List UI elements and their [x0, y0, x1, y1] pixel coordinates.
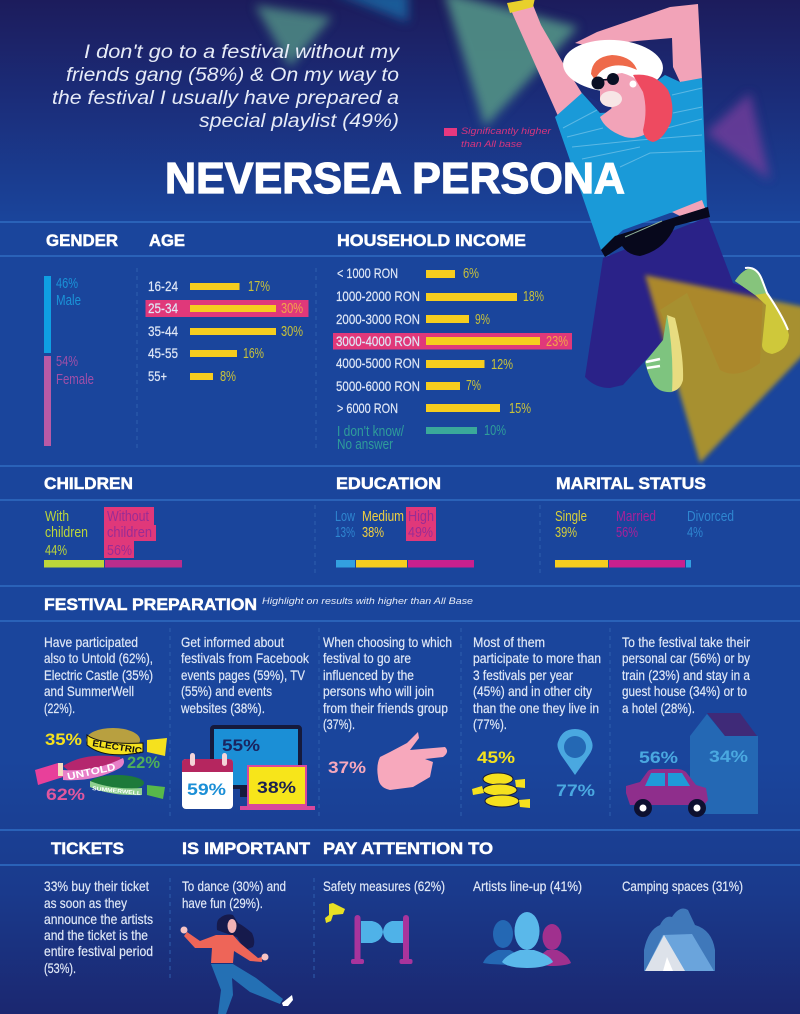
striped shirt [555, 75, 707, 250]
text: travel and stay: train (23%) and stay in a [622, 667, 750, 683]
heading: festival preparation: FESTIVAL PREPARATION [44, 595, 257, 614]
chart: household income: 23% [546, 334, 568, 350]
panel: marital status: Single [555, 509, 587, 525]
icon: location pin: 77% [556, 781, 595, 800]
text: tickets: announce the artists [44, 911, 153, 927]
belt and bum bag [601, 207, 710, 257]
icon: location pin [556, 729, 595, 800]
chart: age [146, 278, 308, 385]
hands [180, 926, 188, 934]
text: festivals attended: Electric Castle (35%) [44, 667, 153, 683]
heading: household income: HOUSEHOLD INCOME [337, 231, 526, 250]
chart: age: 16-24 [148, 278, 178, 294]
panel: gender: 46% [56, 276, 78, 292]
chart: household income [333, 265, 572, 453]
panel: education: Low [335, 509, 355, 525]
text: friends influence: influenced by the [323, 667, 414, 683]
electric label: ELECTRIC [92, 738, 143, 756]
heading: children: CHILDREN [44, 474, 133, 493]
illustration: jumping festival-goer [507, 0, 763, 388]
text: tickets [44, 878, 153, 976]
text: travel and stay: personal car (56%) or by [622, 650, 750, 666]
chart: household income: 3000-4000 RON [336, 333, 420, 349]
panel: education [335, 507, 474, 568]
chart: household income: 10% [484, 423, 506, 439]
icon: safety barrier and camera [325, 903, 412, 964]
panel: education: High [408, 509, 434, 525]
panel: education: 49% [408, 525, 433, 541]
quote: I don't go to a festival without my [84, 41, 400, 63]
panel: gender: Female [56, 372, 94, 388]
text: festival frequency: Most of them [473, 634, 545, 650]
neck gap [587, 96, 618, 113]
chart: age: 30% [281, 324, 303, 340]
beard [600, 91, 622, 107]
text: information sources: websites (38%). [180, 700, 265, 716]
text: is important [182, 878, 286, 911]
icon: stacked wristbands [472, 748, 530, 808]
icon: pointing hand: 37% [328, 758, 366, 777]
untold band back [63, 756, 122, 772]
panel: education: Medium [362, 509, 404, 525]
icon: house: 56% [639, 748, 678, 767]
text: artists: Artists line-up (41%) [473, 878, 582, 894]
panel: marital status: 56% [616, 525, 638, 541]
text: friends influence: (37%). [323, 716, 355, 732]
chart: household income: 15% [509, 401, 531, 417]
laptop [248, 766, 306, 805]
legend: significantly higher: than All base [461, 139, 522, 150]
icon: tv, calendar and laptop: 38% [257, 778, 296, 797]
earring [630, 80, 636, 88]
icon: people [483, 912, 571, 968]
waist skin [672, 200, 705, 216]
hair [217, 914, 254, 950]
jeans [211, 964, 283, 1014]
hair [633, 75, 672, 142]
text: tickets: as soon as they [44, 895, 127, 911]
chart: household income: 2000-3000 RON [336, 311, 420, 327]
panel: gender [44, 276, 94, 446]
untold tab strip [58, 763, 63, 776]
icon: wristbands: 62% [46, 785, 85, 804]
text: tickets: 33% buy their ticket [44, 878, 149, 894]
chart: age: 16% [243, 346, 264, 362]
panel: marital status: 39% [555, 525, 577, 541]
electric tab [147, 738, 167, 756]
hat [562, 37, 664, 95]
panel: children [44, 507, 182, 568]
summerwell tab [147, 785, 165, 799]
chart: household income: 1000-2000 RON [336, 288, 420, 304]
text: information sources: events pages (59%), TV [181, 667, 306, 683]
text: travel and stay: a hotel (28%). [622, 700, 695, 716]
text: camping: Camping spaces (31%) [622, 878, 743, 894]
rope [361, 921, 403, 943]
chart: household income: > 6000 RON [337, 400, 398, 416]
text: information sources: (55%) and events [181, 683, 272, 699]
quote: the festival I usually have prepared a [52, 87, 399, 109]
text: festivals attended: (22%). [44, 700, 75, 716]
icon: wristbands [35, 728, 167, 804]
text: festivals attended: and SummerWell [44, 683, 134, 699]
panel: marital status: Married [616, 509, 656, 525]
text: information sources: Get informed about [181, 634, 284, 650]
right shoe [735, 268, 789, 354]
text: is important: To dance (30%) and [182, 878, 286, 894]
chart: household income: < 1000 RON [337, 265, 398, 281]
text: friends influence [323, 634, 452, 732]
legend: significantly higher: Significantly higher [461, 126, 552, 137]
raised arm [510, 5, 583, 116]
bag zip [625, 221, 662, 237]
posts [354, 915, 360, 963]
face [228, 919, 236, 933]
text: travel and stay: To the festival take their [622, 634, 750, 650]
text: festival frequency: (45%) and in other city [473, 683, 592, 699]
text: festivals attended: also to Untold (62%), [44, 650, 153, 666]
heading: is important: IS IMPORTANT [182, 839, 311, 858]
icon: tv, calendar and laptop: 59% [187, 780, 226, 799]
text: tickets: and the ticket is the [44, 927, 148, 943]
electric band back [86, 728, 140, 752]
text: tickets: (53%). [44, 960, 76, 976]
text: festivals attended: Have participated [44, 634, 138, 650]
icon: tv, calendar and laptop: 55% [222, 736, 260, 755]
chart: age: 30% [281, 301, 303, 317]
text: travel and stay [622, 634, 750, 716]
text: tickets: entire festival period [44, 943, 153, 959]
text: friends influence: persons who will join [323, 683, 434, 699]
panel: education: 13% [335, 525, 355, 541]
sunglasses [592, 73, 619, 90]
text: is important: have fun (29%). [182, 895, 263, 911]
chart: age: 17% [248, 279, 270, 295]
panel: marital status: 4% [687, 525, 703, 541]
hair top [591, 55, 637, 80]
panel: children: 56% [107, 543, 132, 559]
sweater [184, 932, 262, 963]
trousers [585, 217, 763, 388]
chart: household income: 18% [523, 289, 544, 305]
text: festival frequency: (77%). [473, 716, 507, 732]
untold band front [63, 758, 124, 780]
text: festival frequency: than the one they live in [473, 700, 599, 716]
panel: children: Without [107, 509, 149, 525]
chart: age: 45-55 [148, 345, 178, 361]
heading: education: EDUCATION [336, 474, 441, 493]
calendar [182, 759, 233, 809]
electric band front [87, 735, 143, 755]
face [600, 73, 649, 138]
chart: age: 55+ [148, 368, 167, 384]
chart: age: 25-34 [148, 300, 178, 316]
icon: house: 34% [709, 747, 748, 766]
quote: friends gang (58%) & On my way to [66, 64, 399, 86]
chart: age: 8% [220, 369, 236, 385]
text: safety: Safety measures (62%) [323, 878, 445, 894]
left shoe [645, 315, 683, 392]
heading: pay attention to: PAY ATTENTION TO [323, 839, 493, 858]
title: NEVERSEA PERSONA [165, 154, 625, 203]
chart: household income: 5000-6000 RON [336, 378, 420, 394]
legend: significantly higher [444, 126, 552, 150]
arm over head [575, 4, 702, 82]
icon: pointing hand [328, 732, 447, 790]
heading: gender: GENDER [46, 231, 118, 250]
camera [325, 903, 345, 923]
untold tab [35, 763, 63, 785]
chart: household income: 4000-5000 RON [336, 355, 420, 371]
heading: age: AGE [149, 231, 185, 250]
text: travel and stay: guest house (34%) or to [622, 683, 747, 699]
chart: household income: 12% [491, 357, 513, 373]
text: friends influence: from their friends group [323, 700, 448, 716]
summerwell label: SUMMERWELL [92, 786, 142, 797]
text: information sources [180, 634, 310, 716]
icon: dancer [180, 914, 293, 1014]
icon: tv, calendar and laptop [182, 727, 315, 810]
panel: children: children [107, 525, 152, 541]
note: highlight: Highlight on results with higher than All Base [262, 596, 473, 607]
icon: tent [644, 909, 715, 971]
panel: children: With [45, 509, 69, 525]
text: festival frequency: participate to more than [473, 650, 601, 666]
quote: special playlist (49%) [199, 110, 399, 132]
heading: tickets: TICKETS [51, 839, 124, 858]
chart: household income: 7% [466, 378, 481, 394]
chart: household income: 9% [475, 312, 490, 328]
icon: car [626, 769, 708, 817]
icon: wristbands: 22% [127, 753, 160, 772]
text: festival frequency: 3 festivals per year [473, 667, 573, 683]
yellow light triangle over legs [645, 275, 800, 463]
heading: marital status: MARITAL STATUS [556, 474, 706, 493]
bracelet [507, 0, 535, 13]
icon: stacked wristbands: 45% [477, 748, 515, 767]
chart: household income: 6% [463, 266, 479, 282]
chart: age: 35-44 [148, 323, 178, 339]
panel: education: 38% [362, 525, 384, 541]
summerwell band front [90, 781, 142, 795]
panel: children: 44% [45, 543, 67, 559]
icon: house [639, 713, 758, 814]
chart: household income: No answer [337, 437, 393, 453]
chart: household income: I don't know/ [337, 424, 405, 440]
summerwell band back [90, 775, 144, 791]
panel: gender: Male [56, 293, 81, 309]
background light triangles [255, 0, 770, 180]
panel: gender: 54% [56, 354, 78, 370]
icon: wristbands: 35% [45, 730, 82, 749]
panel: marital status [555, 509, 734, 568]
quote [52, 41, 400, 132]
text: information sources: festivals from Facebook [181, 650, 310, 666]
text: friends influence: festival to go are [323, 650, 411, 666]
tv [212, 727, 300, 787]
panel: children: children [45, 525, 88, 541]
text: festival frequency [473, 634, 601, 732]
text: friends influence: When choosing to which [323, 634, 452, 650]
shoe [282, 995, 293, 1006]
text: festivals attended [44, 634, 153, 716]
untold label: UNTOLD [66, 762, 117, 783]
panel: marital status: Divorced [687, 509, 734, 525]
shirt stripes [563, 88, 702, 167]
